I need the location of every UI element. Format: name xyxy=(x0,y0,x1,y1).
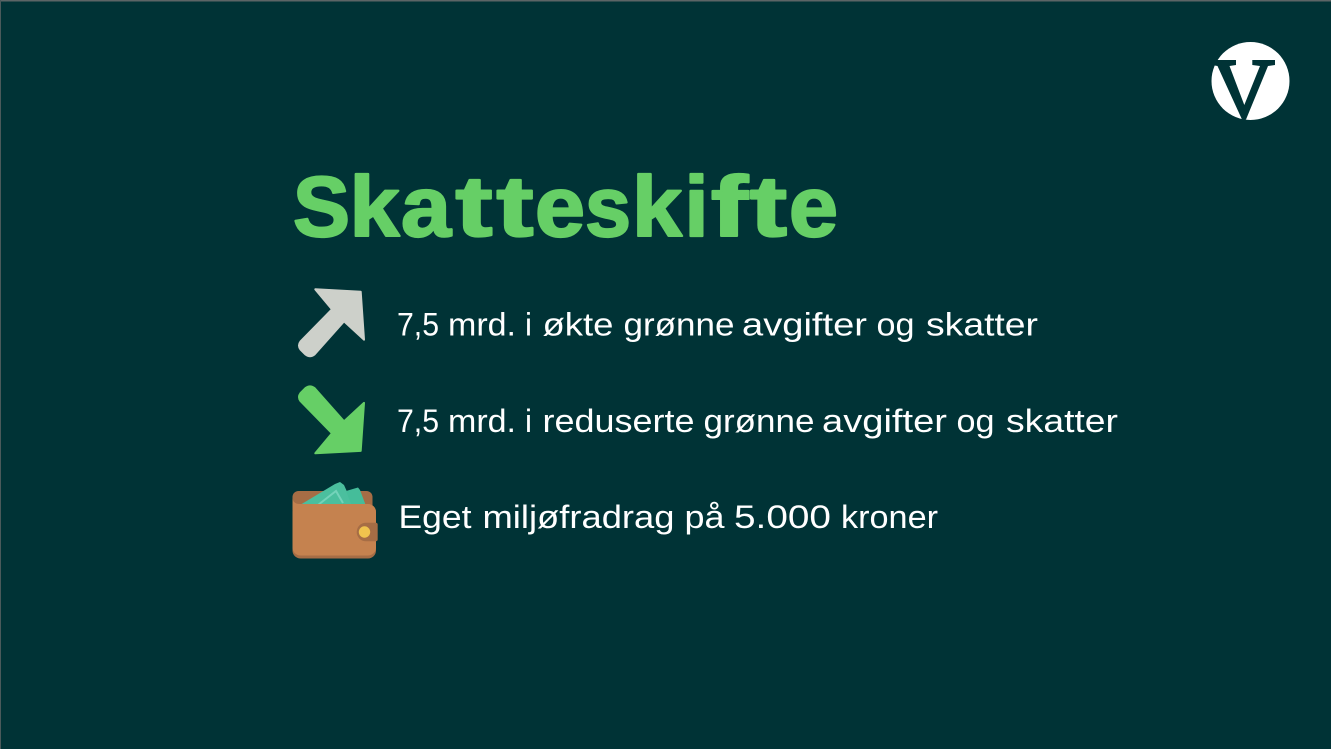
text: reduced taxes: i xyxy=(525,403,532,439)
text: reduced taxes: grønne xyxy=(704,403,814,439)
text: reduced taxes: mrd. xyxy=(448,403,516,439)
icon: down arrow xyxy=(299,386,364,453)
title: t xyxy=(456,160,492,255)
logo xyxy=(1212,42,1290,120)
title: i xyxy=(684,160,708,255)
title: k xyxy=(632,160,683,255)
title: a xyxy=(401,160,452,255)
text: environmental deduction: 5.000 xyxy=(734,499,831,535)
title: s xyxy=(585,160,631,255)
text: environmental deduction: på xyxy=(684,499,726,535)
title: t xyxy=(496,160,534,255)
title: t xyxy=(750,160,787,255)
text: environmental deduction: kroner xyxy=(841,499,938,535)
title: f xyxy=(711,160,749,255)
text: increased taxes: og xyxy=(876,306,914,342)
title: e xyxy=(535,160,585,255)
icon: up arrow xyxy=(299,289,364,356)
text: increased taxes: skatter xyxy=(926,306,1038,342)
text: environmental deduction: Eget xyxy=(398,499,472,535)
text: increased taxes: 7,5 xyxy=(397,306,439,342)
text: reduced taxes: reduserte xyxy=(542,403,694,439)
text: environmental deduction: miljøfradrag xyxy=(482,499,674,535)
text: increased taxes: økte xyxy=(542,306,614,342)
text: reduced taxes: skatter xyxy=(1006,403,1118,439)
text: increased taxes: mrd. xyxy=(448,306,516,342)
text: reduced taxes: avgifter xyxy=(822,403,947,439)
text: increased taxes: grønne xyxy=(624,306,734,342)
title: S xyxy=(293,160,350,255)
text: increased taxes: avgifter xyxy=(742,306,867,342)
title: e xyxy=(789,160,838,255)
text: reduced taxes: 7,5 xyxy=(397,403,439,439)
icon: wallet xyxy=(292,482,378,558)
title: k xyxy=(350,160,400,255)
text: increased taxes: i xyxy=(525,306,532,342)
text: reduced taxes: og xyxy=(956,403,994,439)
